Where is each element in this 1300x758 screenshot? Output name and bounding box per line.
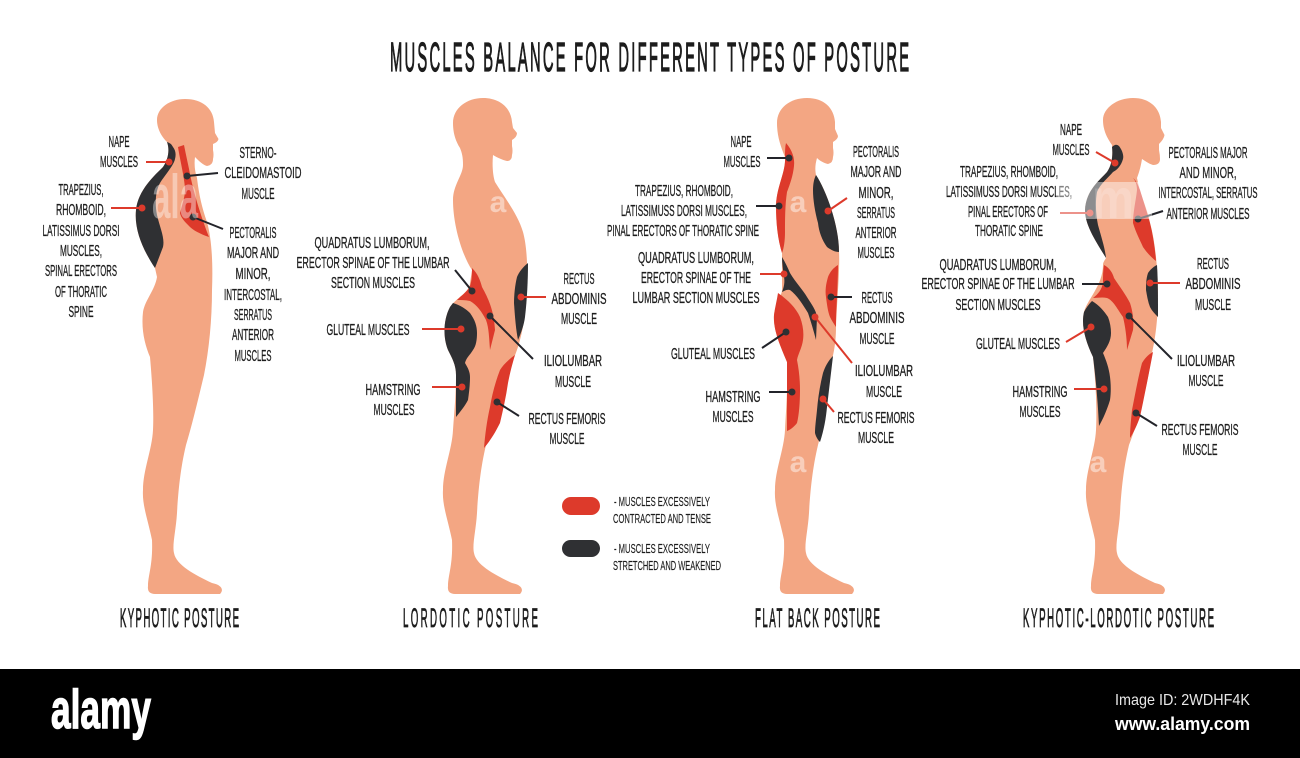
callout: iliolumbar muscle: MUSCLE [555,374,591,391]
legend text: contracted [613,495,711,526]
footer bar [0,669,1300,758]
watermark band: a [1090,446,1107,479]
callout: hamstring muscles [1012,384,1108,421]
legend swatch: contracted [562,497,600,515]
callout: trapezius group: LATISSIMUS DORSI [42,223,120,240]
watermark letters: ala [152,163,198,232]
muscle: nape and trapezius, contracted [776,143,794,253]
body silhouette [1083,98,1165,594]
callout: quadratus lumborum group: ERECTOR SPINAE OF THE [641,270,751,287]
watermark band [1056,167,1152,479]
callout: trapezius group: PINAL ERECTORS OF [968,204,1048,221]
muscle: pectoralis, contracted [1133,178,1156,261]
caption: kyphotic-lordotic posture: KYPHOTIC-LORDOTIC POSTURE [1023,604,1214,634]
callout: gluteal muscles: GLUTEAL MUSCLES [976,336,1060,353]
callout: pectoralis group: SERRATUS [857,205,895,222]
caption: kyphotic posture: KYPHOTIC POSTURE [120,604,239,634]
callout: trapezius group: TRAPEZIUS, [58,182,104,199]
callout: nape muscles: NAPE [108,134,130,151]
callout: nape muscles: MUSCLES [100,154,138,171]
callout: pectoralis group [824,144,902,262]
legend text: stretched: - MUSCLES EXCESSIVELY [614,542,710,556]
callout: quadratus lumborum group: ERECTOR SPINAE OF THE LUMBAR [922,276,1074,293]
figure: kyphotic posture [42,99,302,634]
callout: pectoralis group: ANTERIOR [856,225,896,242]
callout: rectus abdominis muscle [828,290,904,348]
watermark letters [790,186,807,479]
callout: iliolumbar muscle: ILIOLUMBAR [1177,353,1235,370]
callout: pectoralis group: ANTERIOR [232,327,274,344]
callout: iliolumbar muscle: MUSCLE [1188,373,1224,390]
callout: quadratus lumborum group: QUADRATUS LUMBORUM, [638,250,754,267]
callout: pectoralis group: MAJOR AND [850,164,902,181]
callout: gluteal muscles [671,328,790,363]
callout: hamstring muscles [366,382,466,419]
callout: nape muscles [724,134,792,171]
callout: rectus femoris muscle: MUSCLE [550,431,584,448]
callout: rectus abdominis muscle: MUSCLE [860,331,894,348]
callout: iliolumbar muscle [812,314,913,401]
callout: gluteal muscles: GLUTEAL MUSCLES [326,322,410,339]
muscle: pectoralis, stretched [813,175,839,252]
callout: rectus abdominis muscle [1146,256,1240,314]
callout: quadratus lumborum group [296,235,476,294]
callout: trapezius group: RHOMBOID, [56,202,106,219]
legend text: stretched: STRETCHED AND WEAKENED [613,559,721,573]
callout: trapezius group: MUSCLES, [60,243,102,260]
muscle: gluteal and hamstring, stretched [444,303,477,417]
muscle: rectus femoris, stretched [815,356,833,442]
callout: quadratus lumborum group: SECTION MUSCLES [331,275,415,292]
legend text: contracted: CONTRACTED AND TENSE [613,512,711,526]
callout: nape muscles: NAPE [1060,122,1082,139]
callout: gluteal muscles: GLUTEAL MUSCLES [671,346,755,363]
muscle: gluteal and hamstring, contracted [774,293,803,431]
callout: pectoralis group [1134,145,1258,223]
footer logo: alamy [51,678,151,740]
callout: trapezius group: LATISSIMUSS DORSI MUSCLES, [621,203,747,220]
muscle: lumbar and iliolumbar, contracted [1093,265,1133,350]
callout: pectoralis group [190,214,282,365]
legend swatch: stretched [562,540,600,557]
callout: trapezius group [607,183,782,240]
watermark letters: a [790,446,807,479]
callout: rectus abdominis muscle: ABDOMINIS [552,291,606,308]
callout: hamstring muscles [706,388,796,426]
callout: rectus femoris muscle: MUSCLE [858,430,894,447]
callout: rectus abdominis muscle: ABDOMINIS [1186,276,1240,293]
callout: quadratus lumborum group: QUADRATUS LUMBORUM, [940,257,1056,274]
callout: rectus femoris muscle [820,396,914,447]
callout: rectus abdominis muscle: RECTUS [862,290,892,307]
callout: trapezius group [946,164,1094,240]
callout: nape muscles: NAPE [730,134,752,151]
muscle: trapezius and nape, stretched [136,142,176,268]
figure: lordotic posture [296,98,606,634]
callout: trapezius group [42,182,146,321]
muscle: lumbar and iliolumbar, stretched [782,257,817,340]
caption: flat back posture: FLAT BACK POSTURE [755,604,880,634]
watermark band: m [1092,167,1134,230]
callout: hamstring muscles: HAMSTRING [366,382,420,399]
callout: sternocleidomastoid muscle [184,145,302,203]
callout: nape muscles: MUSCLES [724,154,760,171]
callout: rectus abdominis muscle: MUSCLE [1195,297,1231,314]
body silhouette [443,98,527,594]
callout: hamstring muscles: MUSCLES [712,409,754,426]
callout: rectus femoris muscle: RECTUS FEMORIS [838,410,914,427]
figure: flat back posture: PECTORALIS [853,144,899,161]
muscle: rectus abdominis, contracted [826,265,838,327]
callout: pectoralis group: MINOR, [858,185,894,202]
callout: pectoralis group: MUSCLES [234,348,272,365]
figure: flat back posture [607,98,914,634]
muscle: rectus abdominis, stretched [514,263,528,340]
callout: trapezius group: OF THORATIC [55,284,107,301]
callout: quadratus lumborum group [922,257,1110,314]
callout: trapezius group: THORATIC SPINE [975,223,1043,240]
legend [562,495,721,573]
callout: nape muscles [1052,122,1118,166]
callout: rectus abdominis muscle: RECTUS [564,271,594,288]
callout: hamstring muscles: HAMSTRING [1012,384,1068,401]
callout: pectoralis group: PECTORALIS [230,225,276,242]
callout: trapezius group: SPINAL ERECTORS [45,263,117,280]
callout: trapezius group: LATISSIMUSS DORSI MUSCLES, [946,184,1072,201]
callout: iliolumbar muscle [486,312,602,391]
callout: quadratus lumborum group [632,250,788,307]
muscle: sternocleidomastoid and pectoralis, contracted [178,145,209,237]
callout: rectus femoris muscle: RECTUS FEMORIS [528,411,606,428]
muscle: nape and trapezius, stretched [1085,145,1123,258]
caption: lordotic posture: LORDOTIC POSTURE [403,604,538,634]
callout: nape muscles: MUSCLES [1052,142,1090,159]
callout: iliolumbar muscle [1126,312,1235,390]
legend text: contracted: - MUSCLES EXCESSIVELY [614,495,710,509]
callout: gluteal muscles [976,324,1094,353]
footer image id: Image ID: 2WDHF4K [1115,692,1250,709]
legend text: stretched [613,542,721,573]
callout: quadratus lumborum group: ERECTOR SPINAE OF THE LUMBAR [296,255,450,272]
callout: pectoralis group: MINOR, [236,266,270,283]
callout: iliolumbar muscle: MUSCLE [866,384,902,401]
callout: rectus abdominis muscle: RECTUS [1197,256,1229,273]
callout: quadratus lumborum group: SECTION MUSCLES [956,297,1040,314]
callout: rectus femoris muscle [1132,410,1238,459]
callout: rectus abdominis muscle [518,271,606,328]
muscle: rectus abdominis, stretched [1146,265,1158,317]
callout: trapezius group: TRAPEZIUS, RHOMBOID, [635,183,733,200]
callout: pectoralis group: SERRATUS [234,307,272,324]
callout: trapezius group: PINAL ERECTORS OF THORATIC SPINE [607,223,759,240]
callout: sternocleidomastoid muscle: CLEIDOMASTOID [224,165,302,182]
callout: rectus abdominis muscle: MUSCLE [561,311,597,328]
body silhouette [136,99,222,594]
callout: nape muscles [100,134,172,171]
callout: pectoralis group: INTERCOSTAL, [224,287,282,304]
figure: kyphotic-lordotic posture [922,98,1258,634]
callout: pectoralis group: MUSCLES [858,245,894,262]
callout: rectus femoris muscle: MUSCLE [1182,442,1218,459]
muscle: rectus femoris, contracted [1130,352,1153,438]
watermark letter: a [490,186,507,219]
callout: quadratus lumborum group: QUADRATUS LUMBORUM, [314,235,430,252]
callout: trapezius group: TRAPEZIUS, RHOMBOID, [960,164,1058,181]
callout: rectus abdominis muscle: ABDOMINIS [850,310,904,327]
callout: sternocleidomastoid muscle: MUSCLE [242,186,274,203]
callout: quadratus lumborum group: LUMBAR SECTION MUSCLES [632,290,760,307]
callout: rectus femoris muscle [494,398,606,448]
callout: sternocleidomastoid muscle: STERNO- [240,145,276,162]
callout: hamstring muscles: HAMSTRING [706,389,760,406]
muscle: rectus femoris, contracted [484,355,515,448]
muscle: gluteal and hamstring, stretched [1083,301,1111,426]
callout: trapezius group: SPINE [68,304,94,321]
muscle: lumbar and iliolumbar, contracted [457,268,495,350]
callout: iliolumbar muscle: ILIOLUMBAR [544,353,602,370]
callout: pectoralis group: MAJOR AND [227,245,279,262]
callout: hamstring muscles: MUSCLES [374,402,414,419]
callout: hamstring muscles: MUSCLES [1020,404,1060,421]
footer website: www.alamy.com [1114,714,1250,734]
callout: iliolumbar muscle: ILIOLUMBAR [855,363,913,380]
title: MUSCLES BALANCE FOR DIFFERENT TYPES OF POSTURE [390,34,909,80]
callout: pectoralis group: AND MINOR, [1180,165,1236,182]
watermark letters: a [790,186,807,219]
body silhouette [774,98,854,594]
